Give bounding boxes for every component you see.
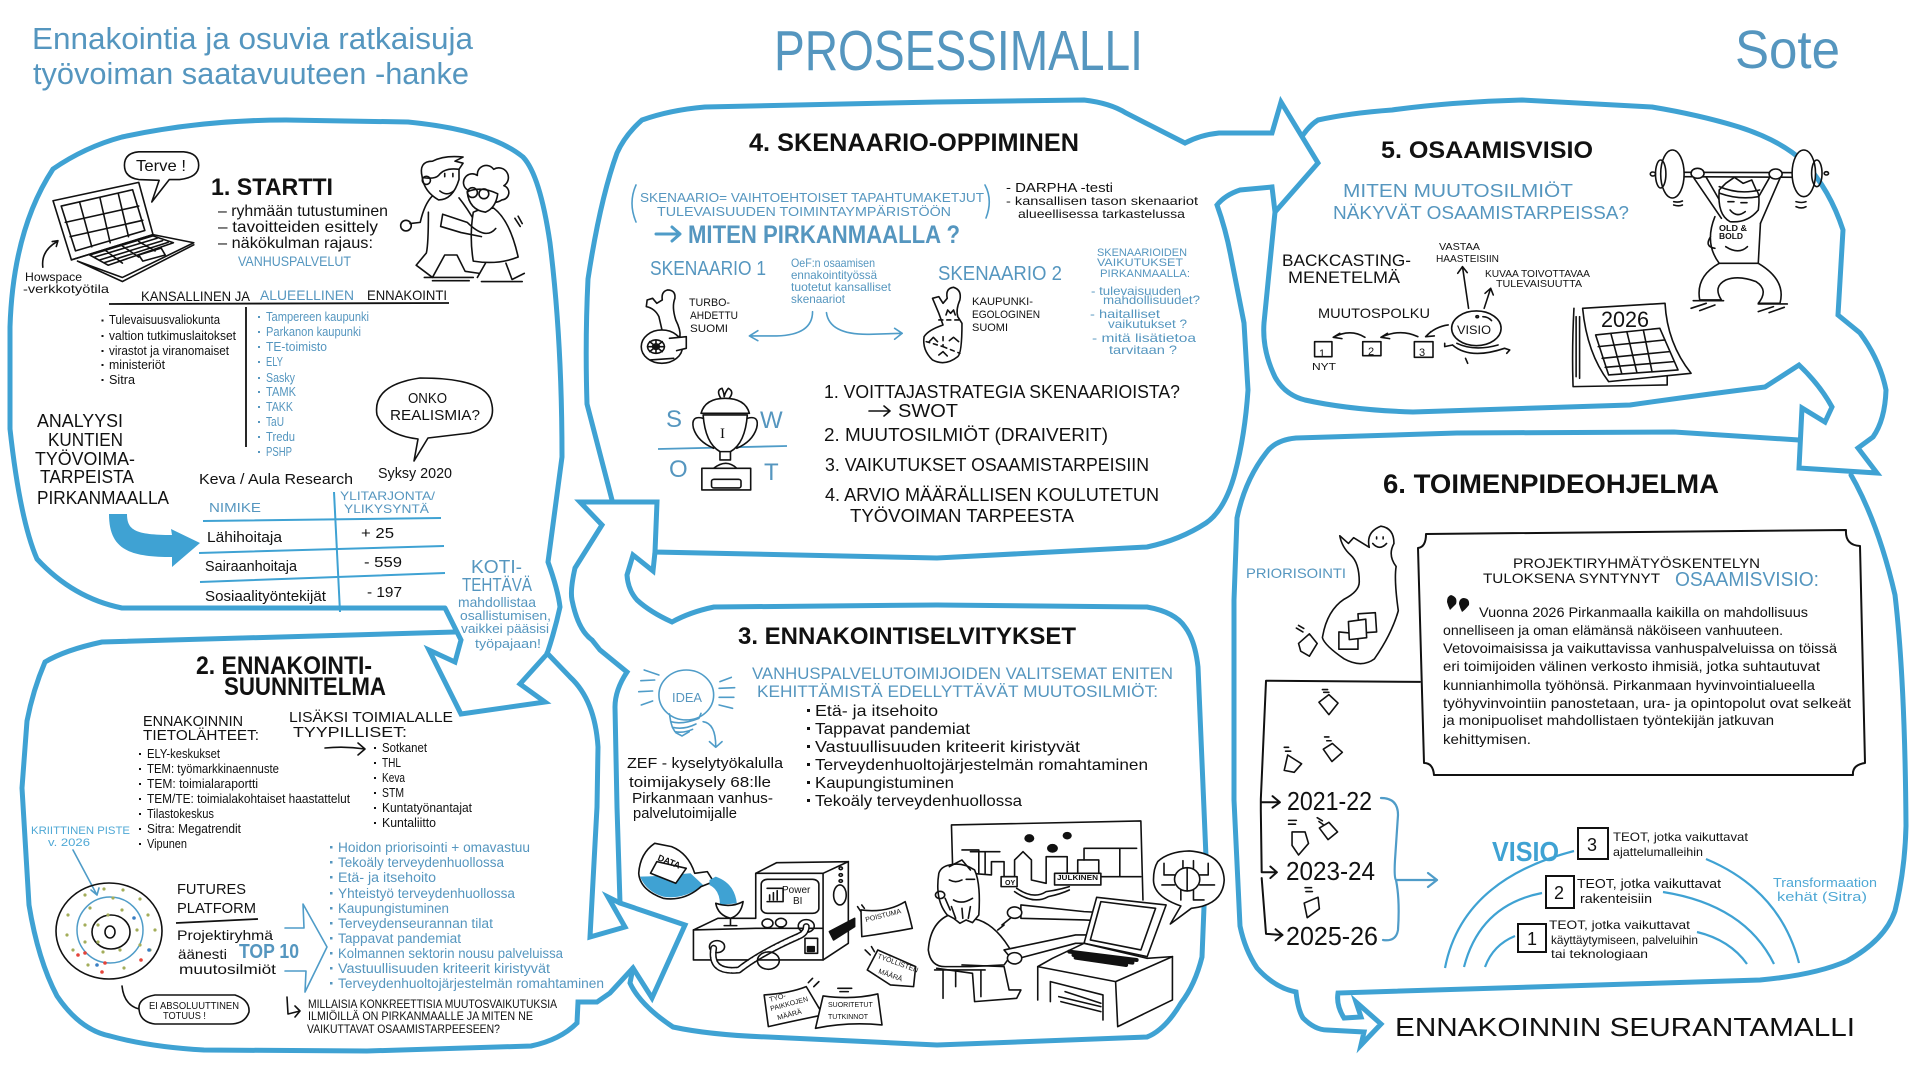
heading: trends in skill needs	[1333, 181, 1629, 223]
text: turbo label: AHDETTU	[690, 310, 738, 322]
text: survey source	[199, 465, 452, 488]
list: sources: TEM: toimialaraportti	[147, 777, 258, 791]
table: labour supply and demand: - 559	[364, 554, 402, 571]
text: futures platform: Projektiryhmä	[177, 927, 273, 943]
heading: actors' selection	[752, 664, 1173, 701]
bubble: not absolute truth: EI ABSOLUUTTINEN	[149, 1001, 239, 1012]
text: vision statement body: kehittymisen.	[1443, 731, 1531, 747]
heading: vision: OSAAMISVISIO:	[1675, 569, 1819, 591]
text: turbo label: SUOMI	[690, 323, 728, 335]
heading: vision: TULOKSENA SYNTYNYT	[1483, 570, 1660, 586]
text: vision statement body: Vuonna 2026 Pirkanmaalla kaikilla on mahdollisuus	[1479, 604, 1808, 620]
illustration: data papers: PAIKKOJEN	[770, 996, 809, 1013]
list: top 10 trends: Hoidon priorisointi + omavastuu	[338, 840, 530, 855]
heading: national and regional foresight: ALUEELLINEN	[260, 287, 354, 303]
list: national actors: Tulevaisuusvaliokunta	[109, 313, 220, 327]
panel outline: 4 Skenaario-oppiminen with arrow	[571, 100, 1318, 903]
diagram: Sitra transformation arcs: 2	[1554, 883, 1564, 903]
text: futures platform: muutosilmiöt	[179, 961, 276, 977]
label: priorisointi: PRIORISOINTI	[1246, 565, 1346, 581]
list: national actors: valtion tutkimuslaitokset	[109, 329, 236, 343]
list: regional actors: TaU	[266, 415, 284, 429]
arrow: to industry sources	[325, 743, 365, 755]
list: sources: TEM: työmarkkinaennuste	[147, 762, 279, 776]
chart: SWOT with trophy: I	[720, 426, 725, 442]
heading: trends in skill needs: MITEN MUUTOSILMIÖT	[1343, 181, 1573, 201]
text: scenario impacts: mahdollisuudet?	[1103, 293, 1200, 307]
list: scenario work phases: TYÖVOIMAN TARPEESTA	[850, 506, 1074, 526]
heading: vision: PROJEKTIRYHMÄTYÖSKENTELYN	[1513, 554, 1760, 571]
diagram: timeline with sticky notes: 2021-22	[1287, 786, 1372, 816]
chart: SWOT with trophy: T	[764, 459, 779, 486]
table: labour supply and demand: Sosiaalityöntekijät	[205, 589, 326, 605]
panel 2 content	[31, 652, 604, 1036]
text: OEF note: ennakointityössä	[791, 268, 877, 282]
diagram: timeline with sticky notes: 2023-24	[1286, 856, 1375, 886]
text: scenario impacts: PIRKANMAALLA:	[1100, 268, 1190, 280]
text: eco label: SUOMI	[972, 322, 1008, 334]
chart: futures radar	[56, 883, 162, 979]
heading: 2. Ennakointisuunnitelma: 2. ENNAKOINTI-	[196, 652, 372, 680]
bubble: onko realismia: ONKO	[408, 390, 447, 407]
title: project name	[32, 21, 474, 91]
chart: SWOT with trophy: O	[669, 456, 688, 483]
arrow: hollow to top ten	[285, 904, 327, 992]
heading: national and regional foresight: KANSALLINEN JA	[141, 288, 251, 304]
heading: foresight follow-up model: ENNAKOINNIN SEURANTAMALLI	[1395, 1012, 1855, 1042]
text: OEF note: tuotetut kansalliset	[791, 280, 892, 294]
panel 3 content	[627, 623, 1224, 1028]
diagram: backcasting path: 3	[1419, 347, 1425, 359]
table: labour supply and demand: YLIKYSYNTÄ	[344, 502, 429, 516]
label: Howspace: Howspace	[25, 270, 82, 284]
list: selected trends: Tekoäly terveydenhuollossa	[815, 793, 1022, 810]
list: scenario work phases	[824, 382, 1180, 526]
heading: scenario 2: SKENAARIO 2	[938, 263, 1062, 285]
list: national actors: ministeriöt	[109, 358, 166, 372]
text: futures platform: äänesti	[178, 946, 227, 962]
text: homework note	[458, 557, 551, 651]
text: scenario impacts: vaikutukset ?	[1108, 317, 1187, 331]
text: vision statement body: kunnianhimolla työhönsä. Pirkanmaan hyvinvointialueella	[1443, 677, 1815, 693]
title: project name: Ennakointia ja osuvia ratkaisuja	[32, 21, 474, 56]
icon: turbo Finland	[641, 290, 686, 363]
illustration: man at laptop, city poster and brain: OY	[1005, 880, 1015, 887]
diagram: Sitra transformation arcs: käyttäytymiseen, palveluihin	[1551, 933, 1698, 947]
list: selected trends: Etä- ja itsehoito	[815, 703, 938, 720]
list: industry sources: Sotkanet	[382, 741, 427, 755]
chart: SWOT with trophy: W	[760, 407, 783, 434]
label: transformation rings: kehät (Sitra)	[1777, 889, 1867, 904]
text: analysis of labour needs	[35, 411, 169, 508]
icon: calendar 2026	[1573, 303, 1691, 387]
text: homework note: osallistumisen,	[460, 608, 551, 623]
bubble: onko realismia	[377, 378, 492, 461]
text: survey source: Syksy 2020	[378, 465, 452, 482]
text: scenario impacts: - tulevaisuuden	[1091, 284, 1181, 298]
label: critical point: KRIITTINEN PISTE	[31, 825, 130, 837]
heading: scenario 1: SKENAARIO 1	[650, 258, 766, 280]
text: homework note: mahdollistaa	[458, 594, 536, 610]
heading: industry sources: TYYPILLISET:	[293, 724, 407, 741]
list: selected trends: Tappavat pandemiat	[815, 721, 971, 738]
label: critical point	[31, 825, 130, 895]
list: top 10 trends: Tekoäly terveydenhuollossa	[338, 855, 504, 870]
diagram: backcasting path: NYT	[1312, 362, 1336, 373]
list: industry sources: Kuntatyönantajat	[382, 801, 473, 815]
bubble text: Terve: Terve !	[136, 158, 186, 175]
heading: trends in skill needs: NÄKYVÄT OSAAMISTARPEISSA?	[1333, 203, 1629, 223]
list: scenario work phases: 4. ARVIO MÄÄRÄLLISEN KOULUTETUN	[825, 485, 1159, 505]
illustration: man at laptop, city poster and brain	[928, 821, 1224, 1027]
heading: national and regional foresight: ENNAKOINTI	[367, 287, 447, 303]
diagram: Sitra transformation arcs: tai teknologiaan	[1551, 947, 1648, 961]
list: scenario work phases: 2. MUUTOSILMIÖT (DRAIVERIT)	[824, 425, 1108, 445]
text: survey source: Keva / Aula Research	[199, 471, 353, 488]
list: top 10 trends: Kolmannen sektorin nousu palveluissa	[338, 946, 563, 961]
text: scenario definition: TULEVAISUUDEN TOIMINTAYMPÄRISTÖÖN	[657, 204, 951, 219]
list: sources: ELY-keskukset	[147, 747, 220, 761]
text: ZEF survey: toimijakysely 68:lle	[629, 774, 771, 791]
text: startti list: – ryhmään tutustuminen	[218, 203, 388, 220]
text: analysis of labour needs: KUNTIEN	[48, 430, 123, 450]
text: Darpha test	[1006, 180, 1199, 221]
text: homework note: TEHTÄVÄ	[462, 575, 532, 595]
text: eco label: EGOLOGINEN	[972, 309, 1040, 321]
diagram: backcasting path: VASTAA	[1439, 242, 1480, 253]
text: vision statement body: onnelliseen ja oman elämänsä näköiseen vanhuuteen.	[1443, 622, 1783, 638]
list: national actors: virastot ja viranomaiset	[109, 344, 229, 358]
text: analysis of labour needs: TARPEISTA	[40, 467, 134, 487]
illustration: old and bold weightlifter: BOLD	[1719, 232, 1743, 241]
diagram: Sitra transformation arcs	[1445, 828, 1799, 968]
arrow: corner to question	[287, 997, 300, 1017]
illustration: data papers: TUTKINNOT	[828, 1014, 869, 1021]
heading: sources: ENNAKOINNIN	[143, 713, 243, 730]
heading: vision	[1483, 554, 1819, 591]
table: labour supply and demand: Lähihoitaja	[207, 530, 283, 546]
text: vision statement body	[1442, 604, 1851, 747]
text: backcasting method	[1282, 251, 1411, 287]
text: startti list: VANHUSPALVELUT	[238, 253, 351, 269]
title: Sote: Sote	[1735, 20, 1840, 80]
bubble: not absolute truth: TOTUUS !	[163, 1011, 206, 1022]
icon: calendar 2026: 2026	[1601, 307, 1649, 332]
list: regional actors: Tredu	[266, 430, 295, 444]
panel 6 content	[1246, 469, 1877, 1042]
label: critical point: v. 2026	[48, 837, 90, 849]
list: scenario work phases: 1. VOITTAJASTRATEGIA SKENAARIOISTA?	[824, 382, 1180, 402]
bubble: onko realismia: REALISMIA?	[390, 407, 480, 424]
list: selected trends: Vastuullisuuden kriteerit kiristyvät	[815, 739, 1081, 756]
text: scenario impacts: VAIKUTUKSET	[1097, 257, 1183, 269]
text: ZEF survey: Pirkanmaan vanhus-	[632, 790, 773, 807]
frame: vision statement	[1418, 530, 1865, 775]
list: national actors	[102, 313, 236, 387]
illustration: data papers: TYÖ-	[768, 992, 787, 1004]
heading: sources	[143, 713, 259, 744]
list: sources: Vipunen	[147, 837, 187, 851]
text: eco label: KAUPUNKI-	[972, 296, 1033, 308]
illustration: data bottle and Power BI machine: Power	[782, 885, 811, 896]
list: regional actors	[258, 310, 369, 459]
text: OEF note: OeF:n osaamisen	[791, 256, 875, 270]
illustration: data papers: TYÖLLISTEN	[876, 952, 919, 975]
text: futures platform: TOP 10	[239, 941, 299, 963]
text: scenario impacts: - haitalliset	[1090, 307, 1161, 321]
heading: 2. Ennakointisuunnitelma: SUUNNITELMA	[224, 673, 386, 701]
list: regional actors: TAMK	[266, 385, 297, 399]
diagram: backcasting path: MUUTOSPOLKU	[1318, 305, 1430, 321]
text: startti list: – näkökulman rajaus:	[218, 235, 373, 252]
list: regional actors: PSHP	[266, 445, 292, 459]
text: backcasting method: MENETELMÄ	[1288, 268, 1401, 287]
text: Darpha test: alueellisessa tarkastelussa	[1018, 207, 1185, 221]
list: industry sources: Kuntaliitto	[382, 816, 436, 830]
heading: 5. Osaamisvisio: 5. OSAAMISVISIO	[1381, 137, 1593, 164]
illustration: data papers: SUORITETUT	[828, 1002, 873, 1009]
text: vision statement body: ja monipuoliset mahdollistaen työntekijän jatkuvan	[1442, 712, 1774, 728]
label: Howspace	[23, 270, 109, 296]
heading: miten Pirkanmaalla: MITEN PIRKANMAALLA ?	[688, 221, 960, 249]
chart: SWOT with trophy: S	[666, 406, 682, 433]
diagram: Sitra transformation arcs: 3	[1587, 835, 1597, 855]
panel outline: 6 Toimenpideohjelma with arrow	[1234, 432, 1906, 1045]
list: sources	[139, 747, 350, 851]
text: Darpha test: - DARPHA -testi	[1006, 180, 1113, 195]
list: sources: TEM/TE: toimialakohtaiset haastattelut	[147, 792, 350, 806]
title: project name: työvoiman saatavuuteen -hanke	[33, 56, 469, 91]
illustration: man helping elderly woman	[401, 157, 524, 282]
icon: idea light bulb: IDEA	[672, 690, 702, 705]
diagram: timeline with sticky notes	[1261, 625, 1437, 951]
diagram: Sitra transformation arcs: TEOT, jotka vaikuttavat	[1613, 830, 1749, 844]
text: turbo label: TURBO-	[689, 297, 730, 309]
list: top 10 trends: Etä- ja itsehoito	[338, 870, 436, 885]
diagram: timeline with sticky notes: 2025-26	[1286, 921, 1378, 951]
text: vision statement body: Vetovoimaisissa ja vaikuttavissa vanhuspalveluissa on töissä	[1443, 640, 1837, 656]
diagram: Sitra transformation arcs: ajattelumalleihin	[1613, 845, 1703, 859]
list: top 10 trends: Kaupungistuminen	[338, 901, 449, 916]
diagram: backcasting path: KUVAA TOIVOTTAVAA	[1485, 269, 1590, 280]
panel outline: 3 Ennakointiselvitykset	[627, 552, 1206, 1045]
arrows: split to scenarios	[749, 312, 902, 341]
text: ZEF survey: palvelutoimijalle	[633, 805, 737, 822]
heading: industry sources	[289, 709, 453, 741]
list: top 10 trends: Tappavat pandemiat	[338, 931, 461, 946]
icon: idea light bulb	[639, 670, 735, 747]
list: regional actors: Tampereen kaupunki	[266, 310, 369, 324]
text: scenario definition: SKENAARIO= VAIHTOEHTOISET TAPAHTUMAKETJUT	[640, 190, 984, 205]
text: vision statement body: työhyvinvointiin panostetaan, ura- ja opintopolut ovat selkeät	[1443, 695, 1851, 711]
text: analysis of labour needs: PIRKANMAALLA	[37, 488, 169, 508]
text: analysis of labour needs: ANALYYSI	[37, 411, 123, 431]
diagram: Sitra transformation arcs: rakenteisiin	[1580, 891, 1652, 906]
illustration: data bottle and Power BI machine	[639, 843, 855, 970]
text: key question	[307, 997, 557, 1036]
text: vision statement body: eri toimijoiden välinen verkosto ihmisiä, jotka suhtautuvat	[1443, 658, 1820, 674]
illustration: old and bold weightlifter: OLD &	[1719, 224, 1747, 233]
heading: national and regional foresight	[109, 287, 449, 447]
icon: laptop with video call and greeting bubble	[43, 152, 199, 282]
list: top 10 trends: Yhteistyö terveydenhuollossa	[338, 886, 515, 901]
arrow: thick blue to table	[109, 514, 200, 567]
illustration: data papers: MÄÄRÄ	[776, 1008, 803, 1022]
list: sources: Sitra: Megatrendit	[147, 822, 241, 836]
text: startti list: – tavoitteiden esittely	[218, 219, 378, 236]
diagram: backcasting path: VISIO	[1457, 323, 1491, 337]
heading: 1. Startti: 1. STARTTI	[211, 174, 333, 201]
text: ZEF survey: ZEF - kyselytyökalulla	[627, 755, 784, 772]
text: OEF note	[791, 256, 892, 306]
heading: sources: TIETOLÄHTEET:	[143, 727, 259, 744]
icon: Finland with sticky notes	[1322, 526, 1398, 664]
illustration: data papers: MÄÄRÄ	[877, 967, 904, 984]
text: key question: VAIKUTTAVAT OSAAMISTARPEESEEN?	[307, 1022, 500, 1036]
list: regional actors: ELY	[266, 355, 283, 369]
text: homework note: KOTI-	[471, 557, 522, 577]
text: key question: ILMIÖILLÄ ON PIRKANMAALLE JA MITEN NE	[308, 1009, 533, 1023]
list: scenario work phases: 3. VAIKUTUKSET OSAAMISTARPEISIIN	[825, 455, 1149, 475]
icon: quote marks	[1447, 595, 1469, 612]
text: scenario impacts: SKENAARIOIDEN	[1097, 247, 1187, 259]
list: industry sources: Keva	[382, 771, 405, 785]
text: futures platform: FUTURES	[177, 881, 246, 898]
diagram: backcasting path: HAASTEISIIN	[1436, 254, 1499, 265]
list: selected trends	[807, 703, 1148, 810]
chart: SWOT with trophy	[658, 388, 787, 490]
diagram: Sitra transformation arcs: TEOT, jotka vaikuttavat	[1549, 918, 1691, 932]
list: selected trends: Kaupungistuminen	[815, 775, 954, 792]
panel 1 content	[23, 152, 551, 651]
panel outline: 2 Ennakointisuunnitelma with arrow	[22, 632, 685, 1051]
table: labour supply and demand: NIMIKE	[209, 500, 261, 515]
list: top 10 trends	[330, 840, 604, 991]
text: homework note: vaikkei pääsisi	[461, 621, 549, 636]
list: regional actors: TE-toimisto	[266, 340, 327, 354]
text: scenario impacts: tarvitaan ?	[1109, 343, 1177, 357]
table: labour supply and demand: Sairaanhoitaja	[205, 559, 298, 575]
text: scenario impacts	[1090, 247, 1200, 357]
text: turbo label	[689, 297, 738, 335]
list: top 10 trends: Terveydenhuoltojärjestelmän romahtaminen	[338, 976, 604, 991]
heading: 4. Skenaario-oppiminen: 4. SKENAARIO-OPPIMINEN	[749, 129, 1079, 157]
title: PROSESSIMALLI: PROSESSIMALLI	[774, 19, 1143, 83]
text: futures platform: PLATFORM	[177, 900, 256, 917]
text: OEF note: skenaariot	[791, 292, 846, 306]
heading: actors' selection: VANHUSPALVELUTOIMIJOIDEN VALITSEMAT ENITEN	[752, 664, 1173, 683]
diagram: backcasting path: 2	[1368, 346, 1374, 358]
panel 4 content	[632, 129, 1200, 526]
diagram: Sitra transformation arcs: TEOT, jotka vaikuttavat	[1577, 876, 1721, 891]
text: backcasting method: BACKCASTING-	[1282, 251, 1411, 270]
label: transformation rings: Transformaation	[1773, 875, 1877, 890]
text: scenario impacts: - mitä lisätietoa	[1092, 331, 1196, 345]
text: scenario definition	[632, 185, 989, 222]
text: futures platform	[176, 881, 299, 977]
icon: eco Finland	[924, 287, 962, 363]
text: homework note: työpajaan!	[475, 636, 541, 651]
illustration: data papers	[764, 902, 919, 1028]
illustration: old and bold weightlifter	[1650, 150, 1829, 313]
illustration: man at laptop, city poster and brain: JULKINEN	[1057, 875, 1098, 882]
illustration: data bottle and Power BI machine: BI	[793, 896, 802, 907]
illustration: data papers: POISTUMA	[865, 908, 902, 924]
diagram: backcasting path: 1	[1319, 348, 1325, 360]
diagram: backcasting path: TULEVAISUUTTA	[1496, 279, 1582, 290]
table: labour supply and demand: - 197	[367, 584, 402, 601]
panel 5 content	[1282, 137, 1829, 387]
text: Darpha test: - kansallisen tason skenaariot	[1006, 194, 1199, 208]
table: labour supply and demand: YLITARJONTA/	[340, 489, 436, 503]
list: sources: Tilastokeskus	[147, 807, 214, 821]
list: top 10 trends: Terveydenseurannan tilat	[338, 916, 493, 931]
diagram: Sitra transformation arcs: VISIO	[1492, 836, 1559, 867]
text: eco label	[972, 296, 1040, 334]
text: analysis of labour needs: TYÖVOIMA-	[35, 449, 135, 469]
list: industry sources: THL	[382, 756, 401, 770]
bubble: not absolute truth	[122, 986, 249, 1024]
heading: 2. Ennakointisuunnitelma	[196, 652, 386, 701]
panel outline: 1 Startti with arrow	[10, 120, 562, 714]
text: key question: MILLAISIA KONKREETTISIA MUUTOSVAIKUTUKSIA	[308, 997, 557, 1011]
illustration: data bottle and Power BI machine: DATA	[656, 853, 682, 871]
heading: industry sources: LISÄKSI TOIMIALALLE	[289, 709, 453, 726]
list: scenario work phases: SWOT	[898, 401, 958, 421]
diagram: backcasting path	[1312, 242, 1590, 373]
list: industry sources	[374, 741, 473, 830]
label: Howspace: -verkkotyötila	[23, 282, 109, 296]
list: industry sources: STM	[382, 786, 404, 800]
text: ZEF survey	[627, 755, 784, 822]
list: selected trends: Terveydenhuoltojärjestelmän romahtaminen	[815, 757, 1148, 774]
table: labour supply and demand: + 25	[361, 525, 394, 542]
list: regional actors: TAKK	[266, 400, 294, 414]
list: top 10 trends: Vastuullisuuden kriteerit kiristyvät	[338, 961, 550, 976]
heading: 6. Toimenpideohjelma: 6. TOIMENPIDEOHJELMA	[1383, 469, 1719, 499]
text: startti list	[218, 203, 388, 269]
diagram: Sitra transformation arcs: 1	[1527, 929, 1537, 949]
list: regional actors: Parkanon kaupunki	[266, 325, 361, 339]
label: transformation rings	[1773, 875, 1877, 904]
list: regional actors: Sasky	[266, 371, 296, 385]
heading: actors' selection: KEHITTÄMISTÄ EDELLYTTÄVÄT MUUTOSILMIÖT:	[757, 682, 1158, 701]
list: national actors: Sitra	[109, 373, 135, 387]
table: labour supply and demand	[199, 489, 445, 612]
panel outline: 5 Osaamisvisio with arrow	[1264, 100, 1886, 473]
heading: 3. Ennakointiselvitykset: 3. ENNAKOINTISELVITYKSET	[738, 623, 1076, 650]
